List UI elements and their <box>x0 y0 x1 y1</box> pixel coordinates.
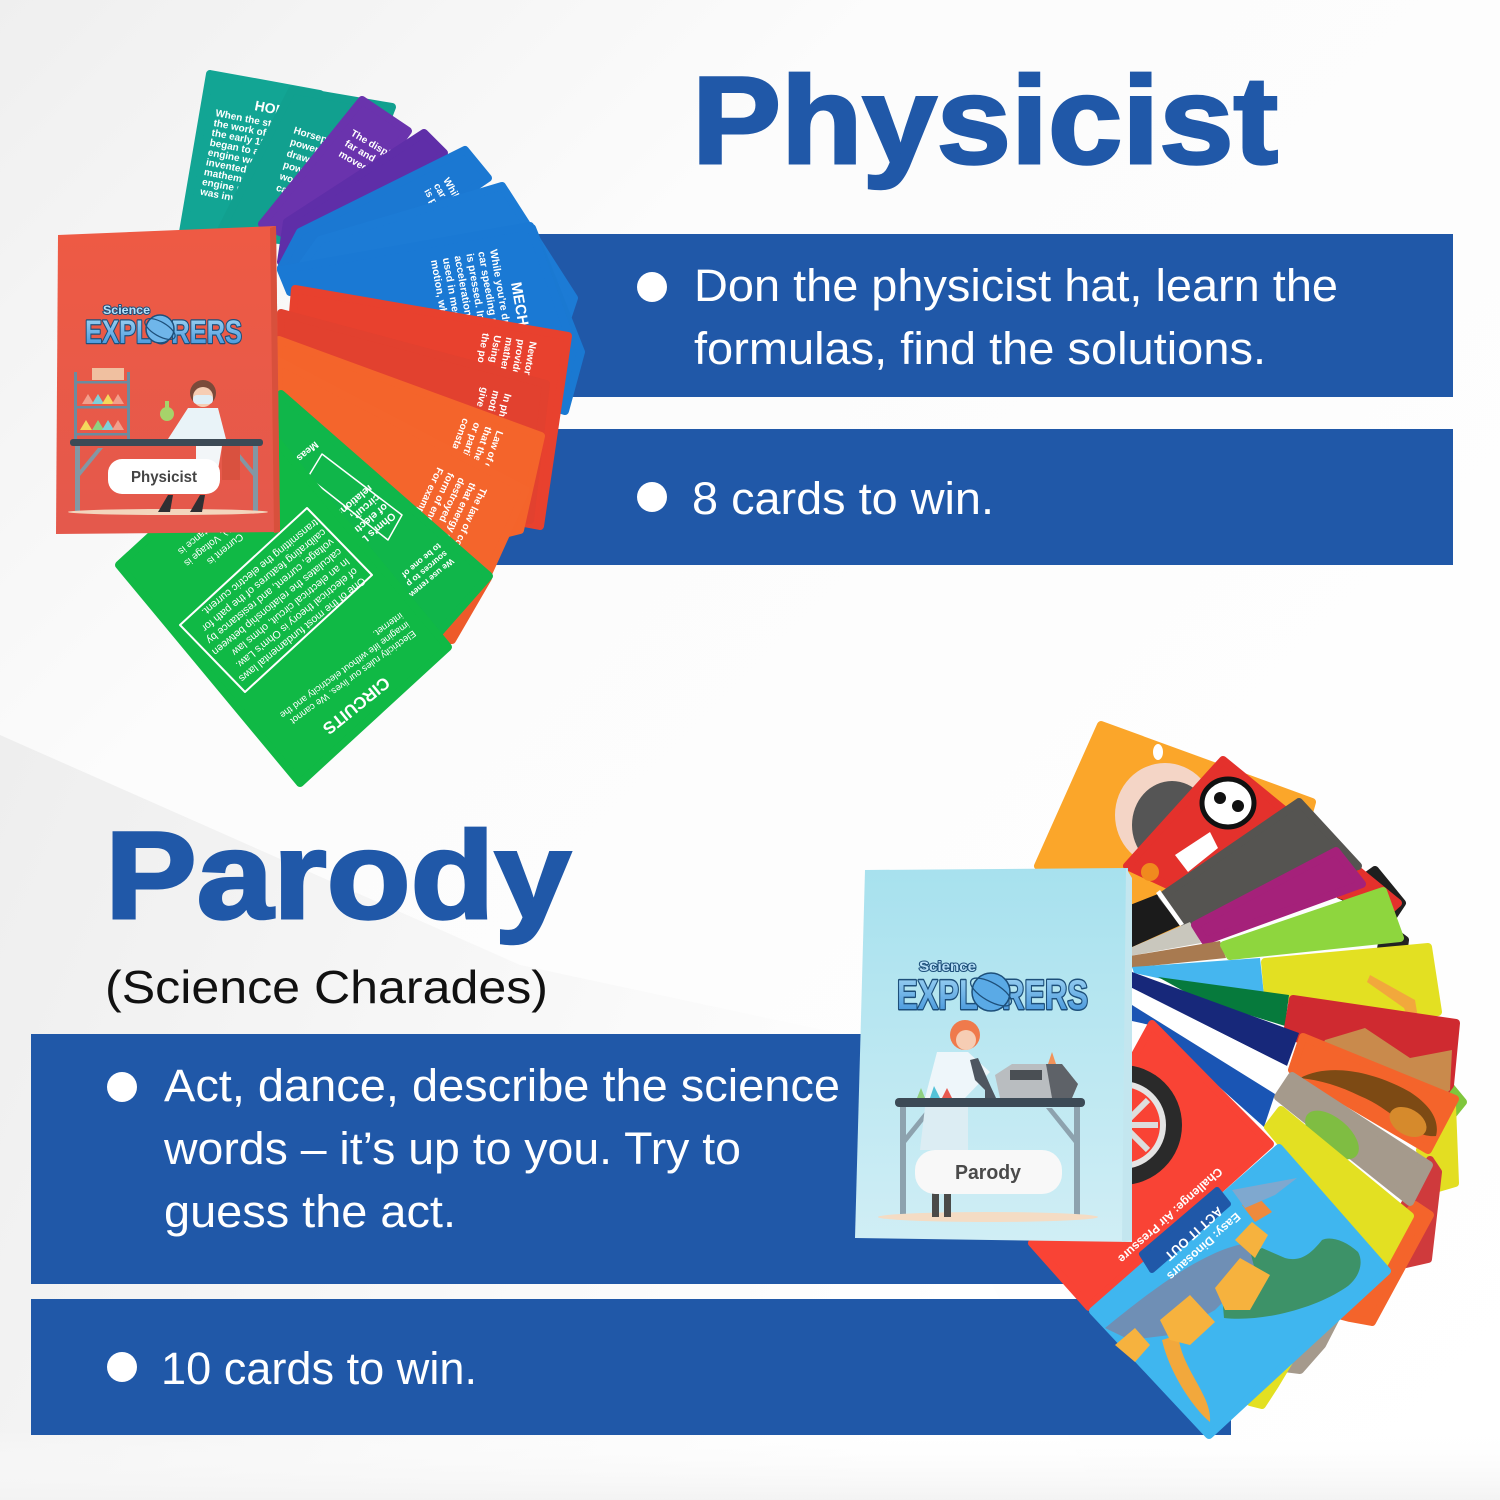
green card text box: voltage, current, and resistance by <box>203 536 336 647</box>
description text: formulas, find the solutions. <box>694 323 1266 374</box>
logo: Science Explorers: Science <box>919 958 976 974</box>
badge: act it out <box>1142 1190 1228 1270</box>
card fan: physicist question cards: acceleration. A <box>452 255 476 330</box>
green card text box: In an electrical circuit, ohms law <box>229 555 352 658</box>
illustration: lab table <box>878 1098 1098 1222</box>
card fan: physicist question cards: car <box>431 182 448 200</box>
card fan: physicist question cards: car speeding up <box>475 251 501 332</box>
green card text box: Resistance is <box>176 510 229 556</box>
illustration: shelf with flasks <box>74 368 130 442</box>
illustration: scientist at microscope <box>917 1020 996 1217</box>
description text: guess the act. <box>164 1186 456 1237</box>
green card text box <box>173 508 418 738</box>
card fan: physicist question cards: the early 180 <box>211 128 273 150</box>
bullet <box>107 1072 137 1102</box>
card fan: physicist question cards: MECH <box>507 281 531 327</box>
bullet <box>637 272 667 302</box>
bullet <box>107 1352 137 1382</box>
card fan: physicist question cards: The displ <box>348 128 392 160</box>
card fan: physicist question cards: Using <box>487 334 502 363</box>
logo: Science Explorers <box>897 958 1088 1018</box>
panel: physicist win condition bar <box>480 429 1453 565</box>
card fan: physicist question cards: form of ene <box>422 471 456 525</box>
logo: Science Explorers: Science <box>103 303 150 317</box>
card fan: physicist question cards: Law of c <box>480 429 505 471</box>
title: Parody: Parody <box>105 807 571 945</box>
label: Parody: Parody <box>955 1162 1022 1184</box>
description text: Act, dance, describe the science <box>164 1060 840 1111</box>
card fan: physicist question cards: mathemati <box>203 167 254 187</box>
card fan: physicist question cards: the pos <box>474 332 491 370</box>
win condition text: 8 cards to win. <box>692 473 994 524</box>
card fan: physicist question cards: power c <box>289 137 328 159</box>
green card text box: calculates the relationship between <box>209 546 344 658</box>
card: grey and black <box>1130 802 1358 948</box>
logo: Science Explorers: EXPLORERS <box>897 971 1088 1018</box>
green card text box: Electricity rules our lives. We cannot <box>288 628 418 726</box>
logo: Science Explorers: EXPLORERS <box>85 314 242 350</box>
green card text box: of electrical theory is Ohm's Law. <box>233 565 360 671</box>
card fan: physicist question cards: destroyed <box>436 476 466 524</box>
card fan: physicist question cards <box>119 74 581 783</box>
card fan: physicist question cards: used in mecha <box>440 257 464 331</box>
green card text box: transmitting the electric current. <box>199 516 320 618</box>
subtitle: Science Charades: (Science Charades) <box>105 961 548 1013</box>
card fan: physicist question cards: capac <box>275 183 305 202</box>
card fan: physicist question cards: circuit, <box>348 491 382 523</box>
card fan: physicist question cards: While you're driv <box>487 248 514 334</box>
bullet <box>637 482 667 512</box>
green card text box: imagine life without electricity and the <box>277 619 411 720</box>
card fan: physicist question cards: power <box>282 160 313 179</box>
card fan: physicist question cards: moved fr <box>336 149 379 180</box>
card: red building <box>1158 977 1456 1100</box>
card fan: physicist question cards: provide <box>509 338 526 376</box>
card fan: physicist question cards: far and i <box>342 138 382 168</box>
card fan: physicist question cards: Newton <box>521 340 538 378</box>
panel: parody win condition bar <box>31 1299 1231 1435</box>
green card text box: One of the most fundamental laws <box>236 575 368 684</box>
card fan: physicist question cards: is pressed. In me <box>463 253 490 339</box>
description text: words – it’s up to you. Try to <box>163 1123 741 1174</box>
win condition text: 10 cards to win. <box>161 1343 477 1394</box>
card fan: physicist question cards: draws <box>285 148 316 167</box>
card fan: physicist question cards: constan <box>447 417 471 456</box>
green card text box: calibrating features of the path for <box>199 526 328 634</box>
card fan: physicist question cards: sources to p <box>405 549 450 589</box>
logo: Science Explorers <box>85 303 242 350</box>
panel: parody description bar <box>31 1034 1111 1284</box>
card fan: physicist question cards: began to ask <box>209 138 271 160</box>
card fan: physicist question cards: The law of con <box>449 486 488 553</box>
label: Physicist: Physicist <box>131 469 198 486</box>
card fan: physicist question cards: that the <box>470 425 493 463</box>
card fan: physicist question cards: engine po <box>201 177 250 197</box>
card box: Parody <box>855 868 1132 1242</box>
card fan: physicist question cards: Whil <box>440 176 461 200</box>
card: orange lion <box>1132 972 1455 1150</box>
card fan: physicist question cards: invented st <box>205 157 259 178</box>
dinosaur <box>1105 1178 1361 1422</box>
card: blue dinosaur: Easy: Dinosaurs <box>1164 1210 1243 1283</box>
badge: act it out: ACT IT OUT <box>1162 1204 1226 1264</box>
card fan: physicist question cards: For exampl <box>412 465 445 519</box>
card: yellow <box>1132 1005 1410 1266</box>
illustration: physicist scientist <box>158 380 240 512</box>
card fan: physicist question cards: Ohm's La <box>354 510 398 549</box>
card fan: physicist question cards: When the steam <box>214 108 292 134</box>
illustration: lab table <box>68 439 268 515</box>
card fan: physicist question cards: relations <box>333 482 375 520</box>
title: Physicist: Physicist <box>692 52 1278 190</box>
label: Physicist <box>108 459 220 494</box>
green card text box: internet. <box>371 610 405 639</box>
card fan: physicist question cards: Meas <box>294 439 320 463</box>
card fan: physicist question cards: give <box>474 386 490 409</box>
label: Parody <box>915 1150 1062 1194</box>
card fan: physicist question cards: engine woul <box>207 147 266 169</box>
card fan: physicist question cards: of electr <box>351 501 390 536</box>
green card text box: CIRCUITS <box>319 673 393 738</box>
card fan: parody picture cards <box>1032 725 1463 1435</box>
card: taupe <box>1132 988 1429 1202</box>
green card text box: Current is <box>204 531 245 567</box>
card fan: physicist question cards: Horsepo <box>292 125 334 148</box>
card fan: physicist question cards: mathem <box>497 336 514 376</box>
card fan: physicist question cards: is p <box>421 187 439 207</box>
card: yellow straw <box>1132 947 1438 1020</box>
card box: Physicist <box>56 226 280 534</box>
card fan: physicist question cards: HOR <box>253 97 287 119</box>
card fan: physicist question cards: works <box>277 171 309 190</box>
card: red skull <box>1127 760 1398 912</box>
card fan: physicist question cards: or parti <box>460 421 482 457</box>
illustration: lab machine <box>995 1052 1078 1098</box>
card fan: physicist question cards: In ph <box>496 392 513 418</box>
card: orange monster <box>1038 725 1312 950</box>
card: blue dinosaur <box>1093 1148 1387 1435</box>
panel: physicist description bar <box>530 234 1453 397</box>
card: red tire: Challenge: Air Pressure <box>1115 1165 1225 1266</box>
card fan: physicist question cards: motion, wheth <box>428 259 452 331</box>
card fan: physicist question cards: that energy c <box>441 481 477 542</box>
card: red tire <box>1032 1024 1270 1307</box>
card fan: physicist question cards: was inven <box>198 186 248 207</box>
card fan: physicist question cards: moti <box>485 389 501 413</box>
card fan: physicist question cards: the work of hor <box>213 118 286 143</box>
card: lime green <box>1130 891 1400 968</box>
description text: Don the physicist hat, learn the <box>694 260 1338 311</box>
card fan: physicist question cards: to be one of <box>400 541 443 580</box>
card: magenta <box>1130 851 1362 956</box>
green card text box: (A), Voltage is <box>182 521 237 568</box>
card fan: physicist question cards: We use renew <box>406 556 456 601</box>
